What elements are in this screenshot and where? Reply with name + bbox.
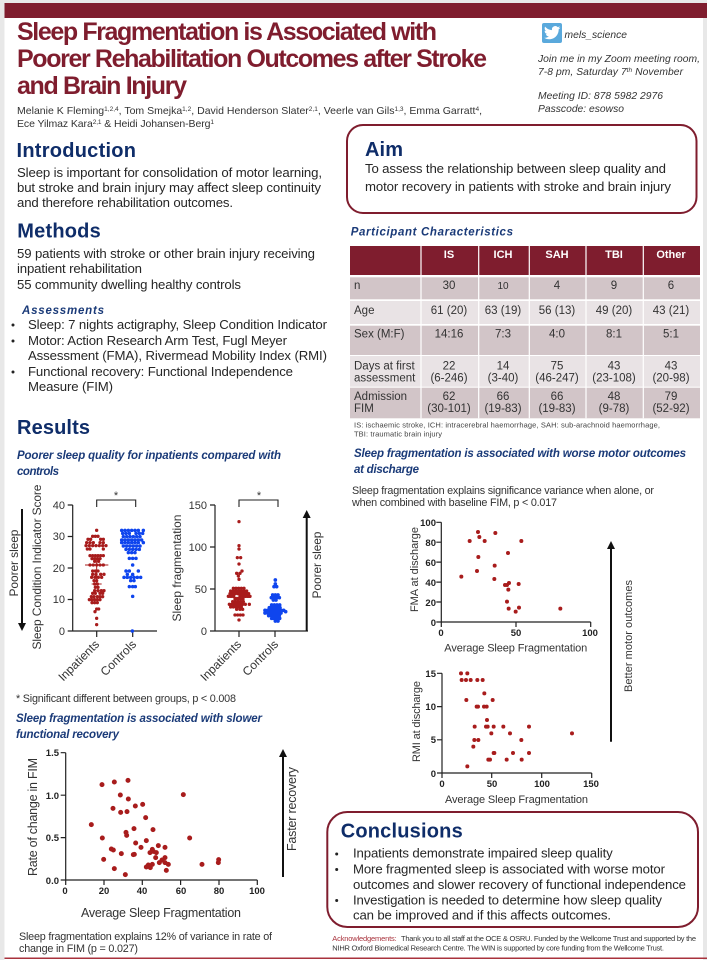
axes: 0.0 [46,876,59,887]
axes: 80 [425,538,436,549]
axes: 10 [425,702,436,713]
axes: 80 [214,886,224,897]
axes: 60 [176,886,186,897]
authors: Ece Yilmaz Kara [17,118,93,130]
panel: conclusions [327,812,698,927]
conclusions list: More fragmented sleep is associated with worse motor [353,861,666,876]
row: admission FIM: 62 [443,391,455,403]
axes: 1.5 [46,748,60,759]
subheading: assessments: Assessments [21,305,104,317]
conclusions list: outcomes and slower recovery of functional independence [353,877,686,892]
axis: sleep fragmentation: 150 [189,500,207,512]
heading: introduction: Introduction [16,140,136,162]
table row fills [350,246,700,418]
axes: 40 [425,578,436,589]
authors: 2,1 [93,119,102,126]
axes: 0 [438,628,444,639]
introduction text: but stroke and brain injury may affect sleep continuity [17,180,321,195]
acknowledgements: Thank you to all staff at the OCE & OSRU. Funded by the Wellcome Trust and supported by the [401,934,696,943]
row: sex: 5:1 [663,329,679,341]
axes [411,669,599,806]
axes: FMA at discharge [409,527,421,612]
significance bracket [239,490,278,507]
authors: 1,2,4 [104,106,119,113]
arrow: poorer sleep up: Poorer sleep [310,531,324,598]
axes: 100 [420,518,436,529]
row: days at first assessment: (6-246) [430,373,468,385]
subheading: worse motor outcomes: Sleep fragmentation is associated with worse motor outcomes [354,448,686,460]
caption: variance in FIM [19,931,273,955]
authors: , Emma Garratt [404,105,476,117]
dots: controls [265,580,286,621]
row: n [354,280,674,292]
row: admission FIM [354,391,690,415]
conclusions list [335,846,686,922]
footnote: significance: * Significant different between groups, p < 0.008 [16,693,236,705]
panel: aim [347,125,696,213]
arrow: better motor outcomes [607,541,635,742]
table header: Other [656,249,686,261]
aim text: motor recovery in patients with stroke and brain injury [365,179,671,194]
table: participant characteristics [350,246,700,418]
subheading: poorer sleep quality [17,450,281,478]
axes: 0 [62,886,68,897]
axis: sleep condition indicator: 40 [53,500,65,512]
axes: 50 [487,779,497,790]
axes: 5 [431,735,437,746]
table footnote: IS: ischaemic stroke, ICH: intracerebral haemorrhage, SAH: sub-arachnoid haemorrhage, [354,421,660,430]
dots: controls [122,530,143,631]
axes: Average Sleep Fragmentation [445,794,588,806]
row: admission FIM: (19-83) [538,403,576,415]
heading: participant characteristics: Participant Characteristics [351,227,513,239]
table footnote [354,421,660,439]
row: n: 30 [443,280,455,292]
axis: sleep condition indicator: 30 [53,531,65,543]
axes: 60 [425,558,436,569]
axis: sleep fragmentation: Inpatients [197,637,244,684]
dots: inpatients [228,522,251,620]
twitter handle and zoom details: Passcode: esowso [538,104,624,115]
arrow: poorer sleep down [7,509,26,631]
axes [409,518,598,655]
assessments list: Motor: Action Research Arm Test, Fugl Meyer [28,333,288,348]
caption: motor variance: when combined with baseline FIM, p < 0.017 [351,497,557,509]
arrow: better motor outcomes: Better motor outcomes [623,580,635,692]
conclusions list: Inpatients demonstrate impaired sleep quality [353,846,613,861]
subheading: poorer sleep quality: controls [17,466,59,478]
arrow: poorer sleep down: Poorer sleep [7,529,21,596]
axes [26,748,265,920]
axes: 100 [249,886,265,897]
row: days at first assessment: 75 [551,361,563,373]
axes: Average Sleep Fragmentation [81,906,241,920]
axis: sleep fragmentation [170,500,308,684]
axes: Rate of change in FIM [26,758,40,876]
title [17,18,487,100]
axes: 0.5 [46,833,60,844]
row: sex: 8:1 [606,329,622,341]
subheading: slower functional recovery: Sleep fragmentation is associated with slower [16,713,263,725]
conclusions list: can be improved and if this affects outcomes. [353,907,611,922]
axes: 0 [439,779,445,790]
caption: motor variance [351,485,654,509]
data points [91,780,219,875]
table header [350,246,700,275]
subheading: worse motor outcomes: at discharge [354,464,420,476]
row: admission FIM: 66 [551,391,563,403]
axes: 40 [137,886,147,897]
acknowledgements: Acknowledgements: [332,934,397,943]
methods text [17,246,315,292]
row: days at first assessment [354,361,690,385]
title: Poorer Rehabilitation Outcomes after Stroke [17,45,487,73]
twitter handle and zoom details: November [632,67,684,78]
axis: sleep fragmentation: Sleep fragmentation [170,514,184,622]
row: days at first assessment: (3-40) [488,373,519,385]
axes: 150 [583,779,599,790]
row: n: 6 [668,280,674,292]
authors: , [479,105,482,117]
row: admission FIM: FIM [354,403,374,415]
title: and Brain Injury [17,72,187,100]
authors: 1,2 [182,106,192,113]
subheading: slower functional recovery: functional recovery [16,729,120,741]
panel: methods [12,220,328,394]
row: age [354,305,689,317]
methods text: 59 patients with stroke or other brain injury receiving [17,246,315,261]
data points [461,532,560,612]
twitter handle and zoom details [537,30,700,115]
axis: sleep condition indicator: 0 [59,626,65,638]
assessments list [12,317,328,394]
heading: aim: Aim [365,139,403,161]
dots: inpatients [85,530,108,625]
axes: 1.0 [46,791,59,802]
row: days at first assessment: (20-98) [652,373,690,385]
axis: sleep fragmentation: Controls [240,637,281,679]
row: admission FIM: 79 [665,391,677,403]
row: age: Age [354,305,374,317]
row: admission FIM: (30-101) [427,403,471,415]
icon: twitter [542,23,562,43]
aim text: To assess the relationship between sleep quality and [365,161,666,176]
authors: , David Henderson Slater [191,105,309,117]
row: sex: 7:3 [495,329,511,341]
introduction text: Sleep is important for consolidation of motor learning, [17,165,322,180]
assessments list: Functional recovery: Functional Independence [28,364,293,379]
introduction text [17,165,322,210]
row: sex: 4:0 [549,329,565,341]
chart: RMI at discharge scatter [411,669,599,806]
axes: 20 [99,886,109,897]
table header: ICH [494,249,513,261]
methods text: 55 community dwelling healthy controls [17,277,241,292]
axis: sleep condition indicator [30,484,157,684]
row: age: 43 (21) [653,305,689,317]
authors: , Veerle van Gils [318,105,394,117]
axes: RMI at discharge [411,681,423,762]
chart: FMA at discharge scatter [409,518,598,655]
row: days at first assessment: 22 [443,361,455,373]
row: days at first assessment: 14 [497,361,510,373]
row: days at first assessment: 43 [665,361,677,373]
row: n: 4 [554,280,561,292]
axes: Average Sleep Fragmentation [444,643,587,655]
assessments list: Assessment (FMA), Rivermead Mobility Index (RMI) [28,348,327,363]
authors: 1 [210,119,214,126]
header bar [4,3,707,18]
row: n: n [354,280,360,292]
axis: sleep condition indicator: Sleep Condition Indicator Score [30,484,44,650]
subheading: slower functional recovery [16,713,263,741]
conclusions list: Investigation is needed to determine how sleep quality [353,892,662,907]
acknowledgements: NIHR Oxford Biomedical Research Centre. The WIN is supported by core funding from the Wellcome Trust. [332,944,664,953]
assessments list: Measure (FIM) [28,379,113,394]
axes: 0 [431,769,436,780]
row: days at first assessment: assessment [354,373,416,385]
subheading: poorer sleep quality: Poorer sleep quality for inpatients compared with [17,450,281,462]
axes: 100 [534,779,550,790]
chart: rate of change in FIM scatter [26,748,265,920]
acknowledgements [332,934,696,953]
twitter handle and zoom details: th [627,67,633,74]
axes: 15 [425,669,437,680]
methods text: inpatient rehabilitation [17,261,142,276]
axis: sleep fragmentation: 100 [189,542,207,554]
significance bracket: * [257,490,262,502]
authors: Melanie K Fleming [17,105,104,117]
axis: sleep fragmentation: 50 [195,584,207,596]
row: days at first assessment: 43 [608,361,620,373]
table header: TBI [605,249,623,261]
row: days at first assessment: (23-108) [592,373,636,385]
row: n: 10 [497,281,509,292]
axis: sleep condition indicator: 10 [53,594,65,606]
chart: sleep condition indicator swarm [30,484,157,684]
row: age: 63 (19) [485,305,521,317]
row: admission FIM: (19-83) [484,403,522,415]
arrow: poorer sleep up [303,510,324,631]
subheading: worse motor outcomes [354,448,686,476]
row: days at first assessment: (46-247) [535,373,579,385]
arrow: faster recovery: Faster recovery [285,766,299,851]
axes: 100 [582,628,598,639]
significance bracket [97,490,136,507]
row: admission FIM: (52-92) [652,403,690,415]
caption: motor variance: Sleep fragmentation explains significance variance when alone, or [352,485,654,497]
heading: conclusions: Conclusions [341,821,463,843]
table footnote: TBI: traumatic brain injury [354,430,442,439]
authors: , Tom Smejka [119,105,182,117]
authors: 2,1 [309,106,318,113]
table header: IS [444,249,454,261]
axis: sleep condition indicator: Controls [98,637,139,679]
aim text [365,161,671,194]
row: sex: Sex (M:F) [354,329,405,341]
axes: 20 [425,598,436,609]
significance bracket: * [114,490,119,502]
authors: 4 [475,106,479,113]
heading: results: Results [17,417,90,439]
axes: 50 [511,628,521,639]
axes: 0 [431,618,436,629]
caption: variance in FIM: change in FIM (p = 0.027) [19,943,138,955]
row: sex: 14:16 [435,329,463,341]
introduction text: and therefore rehabilitation outcomes. [17,195,233,210]
axis: sleep fragmentation: 0 [201,626,207,638]
authors: 1,3 [394,106,404,113]
arrow: faster recovery [279,749,299,877]
chart: sleep fragmentation swarm [170,490,308,684]
twitter handle and zoom details: 7-8 pm, Saturday 7 [538,67,627,78]
assessments list: Sleep: 7 nights actigraphy, Sleep Condition Indicator [28,317,328,332]
row: admission FIM: Admission [354,391,407,403]
twitter handle and zoom details: Join me in my Zoom meeting room, [537,54,700,65]
data points [461,673,572,766]
row: age: 61 (20) [431,305,467,317]
row: admission FIM: 66 [497,391,509,403]
authors [17,105,482,130]
panel: introduction [16,140,322,210]
row: age: 56 (13) [539,305,575,317]
axis: sleep condition indicator: 20 [53,563,65,575]
twitter handle and zoom details: Meeting ID: 878 5982 2976 [538,91,663,102]
row: age: 49 (20) [596,305,632,317]
heading: methods: Methods [17,220,101,242]
row: sex [354,329,679,341]
row: admission FIM: (9-78) [599,403,630,415]
row: admission FIM: 48 [608,391,620,403]
caption: variance in FIM: Sleep fragmentation explains 12% of variance in rate of [19,931,273,943]
row: n: 9 [611,280,617,292]
table header: SAH [545,249,569,261]
axis: sleep condition indicator: Inpatients [55,637,102,684]
row: days at first assessment: Days at first [354,361,416,373]
title: Sleep Fragmentation is Associated with [17,18,437,46]
twitter handle and zoom details: mels_science [564,30,627,41]
authors: & Heidi Johansen-Berg [101,118,211,130]
